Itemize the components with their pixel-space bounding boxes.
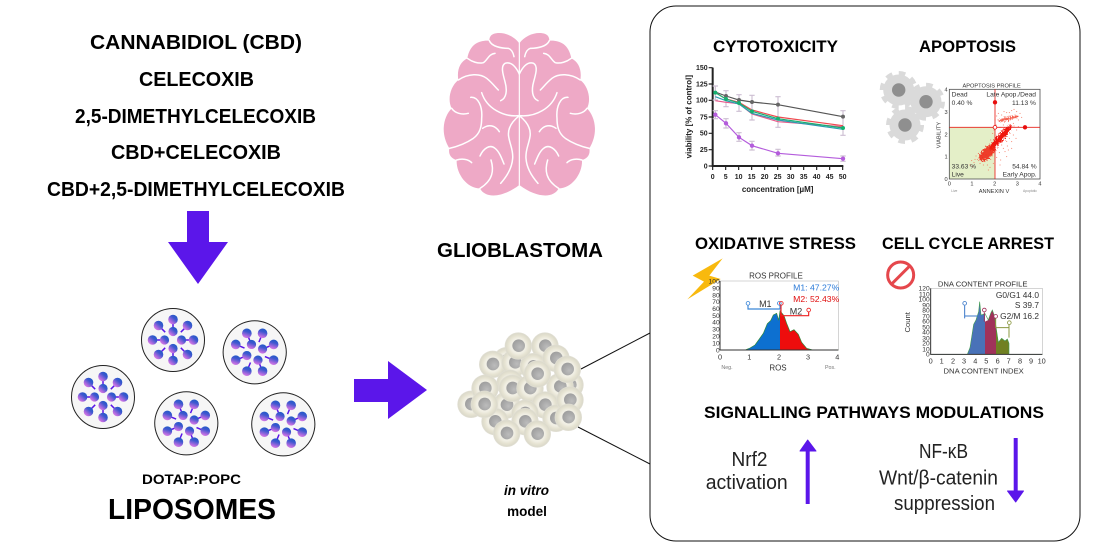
chart: apoptosis scatter: Late Apop./Dead [986,92,1036,99]
liposome 4 [145,382,227,464]
heading: signalling pathways: SIGNALLING PATHWAYS MODULATIONS [704,404,1044,422]
arrow: right to in vitro model [354,361,427,419]
chart: viability line chart: 5 [724,174,728,181]
liposome 1 [142,308,204,372]
chart: ROS histogram: M1 [759,299,772,309]
error bars [713,86,846,161]
chart: ROS histogram: 3 [806,352,810,361]
chart: viability line chart: 30 [787,174,795,181]
series: gray [715,92,843,117]
series: purple [715,115,843,159]
liposome 2 [214,311,296,393]
text: Nrf2 activation: activation [706,472,788,494]
chart: DNA content histogram: 40 [922,330,930,337]
chart: DNA content histogram: 3 [962,357,966,366]
chart: ROS histogram: M2 [790,307,802,317]
chart: ROS histogram: 60 [712,306,720,313]
chart: apoptosis scatter: 4 [1038,182,1042,188]
label: liposomes: LIPOSOMES [108,494,276,526]
compound: CBD+celecoxib: CBD+CELECOXIB [111,142,281,164]
chart: DNA content histogram: S 39.7 [1015,300,1039,310]
icon: gears [882,74,942,142]
chart: DNA content histogram: 80 [922,308,930,315]
chart: viability line chart: 25 [700,147,708,154]
chart: DNA content histogram: 5 [984,357,988,366]
chart: apoptosis scatter: 1 [945,155,948,161]
icon: brain [444,33,595,195]
chart: apoptosis scatter: 3 [945,110,948,116]
chart: viability line chart: 20 [761,174,769,181]
chart: viability line chart: 45 [826,174,834,181]
connector: bottom [578,427,650,464]
chart: DNA content histogram: 100 [919,297,930,304]
text: Nrf2 activation [706,449,788,494]
chart: viability line chart: 10 [735,174,743,181]
chart: ROS histogram: 70 [712,299,720,306]
chart: ROS histogram: ROS PROFILE [749,271,803,280]
chart: DNA content histogram [903,279,1046,375]
chart: ROS histogram: 2 [777,352,781,361]
chart: viability line chart: viability [% of control] [685,75,694,158]
chart: apoptosis scatter: 2 [993,182,996,188]
chart: ROS histogram: M1: 47.27% [793,282,840,292]
chart: DNA content histogram: 7 [1007,357,1011,366]
chart: ROS histogram: 90 [712,285,720,292]
icon: prohibition sign [888,262,914,288]
chart: viability line chart: 150 [696,65,708,72]
compound list [47,32,345,201]
connector: top [581,333,650,369]
chart: viability line chart: 0 [711,174,715,181]
chart: DNA content histogram: 70 [922,313,930,320]
text: Nrf2 activation: Nrf2 [732,449,768,471]
chart: apoptosis scatter: Live [951,189,958,193]
chart: DNA content histogram: 0 [926,352,930,359]
chart: DNA content histogram: 30 [922,335,930,342]
chart: apoptosis scatter: 2 [945,132,948,138]
compound: 2,5-dimethylcelecoxib: 2,5-DIMETHYLCELECOXIB [75,106,316,128]
chart: DNA content histogram: G2/M 16.2 [1000,311,1039,321]
chart: apoptosis scatter: VIABILITY [936,122,942,148]
chart: DNA content histogram: 10 [1038,357,1046,366]
heading: cytotoxicity: CYTOTOXICITY [713,38,838,56]
chart: viability line chart: 50 [839,174,847,181]
chart: DNA content histogram: 2 [951,357,955,366]
chart: viability line chart: 35 [800,174,808,181]
chart: DNA content histogram: 20 [922,341,930,348]
liposome 5 [242,383,324,465]
heading: cell cycle arrest: CELL CYCLE ARREST [882,235,1054,253]
chart: apoptosis scatter: 0 [945,177,948,183]
chart: viability line chart: 40 [813,174,821,181]
chart: viability line chart: 50 [700,131,708,138]
text: NF-κB, Wnt/β-catenin suppression: NF-κB [919,441,968,463]
chart: apoptosis scatter: 1 [970,182,974,188]
compound: celecoxib: CELECOXIB [139,69,254,91]
icon: lightning bolt [687,258,723,299]
chart: DNA content histogram: G0/G1 44.0 [996,290,1039,300]
heading: apoptosis: APOPTOSIS [919,38,1016,56]
chart: apoptosis scatter [936,84,1042,195]
chart: DNA content histogram: 90 [922,302,930,309]
chart: viability line chart: concentration [µM] [742,185,814,194]
compound: CBD: CANNABIDIOL (CBD) [90,32,302,54]
label: DOTAP:POPC: DOTAP:POPC [142,472,241,487]
heading: oxidative stress: OXIDATIVE STRESS [695,235,856,253]
chart: ROS histogram: 1 [747,352,751,361]
panel: outcomes [650,6,1080,541]
chart: ROS histogram: Neg. [721,365,733,371]
label: in vitro model [504,483,549,519]
chart: DNA content histogram: 10 [922,346,930,353]
chart: ROS histogram: 4 [835,352,839,361]
chart: DNA content histogram: 50 [922,324,930,331]
arrow: down [1008,438,1024,502]
chart: ROS histogram: 50 [712,313,720,320]
chart: DNA content histogram: DNA CONTENT INDEX [944,366,1024,375]
chart: viability line chart: 25 [774,174,782,181]
chart: apoptosis scatter: Early Apop. [1003,172,1037,179]
chart: DNA content histogram: Count [903,311,912,333]
chart: viability line chart: 125 [696,81,708,88]
liposome 3 [72,366,134,428]
chart: apoptosis scatter: 3 [1016,182,1019,188]
text: NF-κB, Wnt/β-catenin suppression: Wnt/β-catenin [879,468,998,490]
chart: ROS histogram [709,271,840,372]
chart: ROS histogram: 0 [716,347,720,354]
chart: DNA content histogram: 8 [1018,357,1022,366]
series: green [715,93,843,128]
chart: apoptosis scatter: 54.84 % [1012,163,1037,170]
chart: DNA content histogram: DNA CONTENT PROFILE [938,279,1027,288]
series: pink [715,101,843,127]
chart: DNA content histogram: 6 [996,357,1000,366]
chart: apoptosis scatter: 0 [948,182,951,188]
chart: DNA content histogram: 110 [919,291,930,298]
chart: apoptosis scatter: 11.13 % [1012,100,1036,107]
chart: apoptosis scatter: Live [952,172,964,179]
chart: viability line chart: 0 [704,163,708,170]
chart: apoptosis scatter: 33.63 % [952,163,976,170]
chart: ROS histogram: 100 [709,278,720,285]
chart: apoptosis scatter: 4 [945,88,948,94]
liposomes cluster [72,308,324,465]
chart: viability line chart: 75 [700,114,708,121]
chart: apoptosis scatter: Dead [952,92,968,99]
chart: apoptosis scatter: ANNEXIN V [979,189,1009,195]
chart: apoptosis scatter: Apoptotic [1023,189,1037,193]
chart: viability line chart: 15 [748,174,756,181]
chart: DNA content histogram: 4 [973,357,977,366]
series: teal [715,97,843,129]
chart: DNA content histogram: 9 [1029,357,1033,366]
chart: DNA content histogram: 1 [940,357,944,366]
chart: viability line chart [685,65,847,194]
text: NF-κB, Wnt/β-catenin suppression [879,441,998,515]
label: in vitro model: model [507,504,547,519]
chart: ROS histogram: Pos. [825,365,836,371]
chart: DNA content histogram: 120 [919,286,930,293]
arrow: up [800,440,816,504]
chart: ROS histogram: 30 [712,327,720,334]
series: red [715,93,843,126]
chart: DNA content histogram: 0 [929,357,933,366]
chart: ROS histogram: M2: 52.43% [793,294,840,304]
icon: in vitro cell cluster [457,332,584,448]
chart: DNA content histogram: 60 [922,319,930,326]
arrow: down to liposomes [168,211,228,284]
compound: CBD+2,5-dimethylcelecoxib: CBD+2,5-DIMETHYLCELECOXIB [47,179,345,201]
scatter points [970,109,1022,170]
chart: ROS histogram: 40 [712,320,720,327]
label: glioblastoma: GLIOBLASTOMA [437,240,603,262]
chart: ROS histogram: 10 [712,340,720,347]
chart: apoptosis scatter: APOPTOSIS PROFILE [962,84,1021,90]
chart: ROS histogram: 0 [718,352,722,361]
label: in vitro model: in vitro [504,483,549,498]
chart: ROS histogram: 20 [712,334,720,341]
text: NF-κB, Wnt/β-catenin suppression: suppression [894,493,995,515]
chart: viability line chart: 100 [696,98,708,105]
chart: apoptosis scatter: 0.40 % [952,100,972,107]
chart: ROS histogram: 80 [712,292,720,299]
chart: ROS histogram: ROS [769,363,787,372]
